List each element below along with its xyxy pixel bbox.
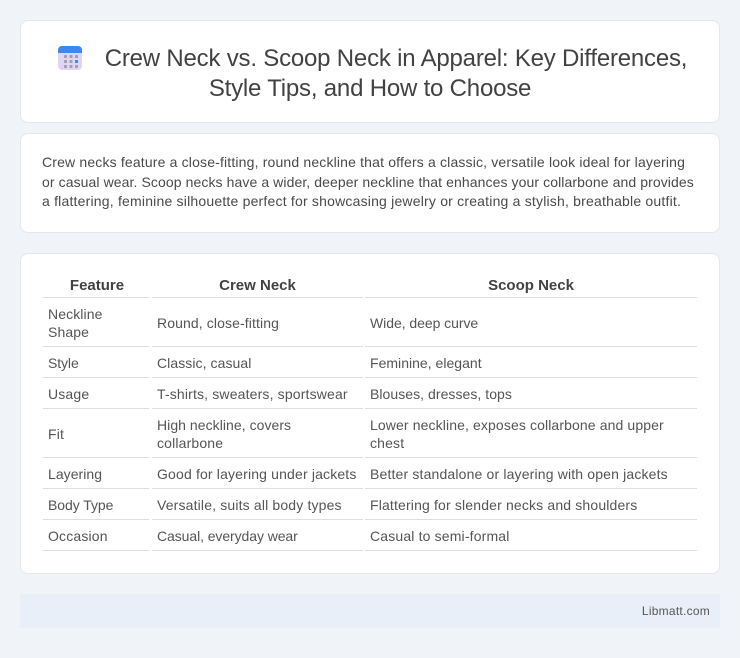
header: Feature: Feature [70, 277, 124, 294]
row: Layering: Layering [48, 466, 102, 482]
title [105, 45, 687, 102]
footer text: Libmatt.com [642, 604, 710, 618]
comparison table: T-shirts, sweaters, sportswear [157, 386, 348, 402]
comparison table: Lower neckline, exposes collarbone and upper [370, 417, 664, 433]
intro text [42, 154, 694, 209]
comparison table: Casual to semi-formal [370, 528, 510, 544]
comparison table: Classic, casual [157, 355, 251, 371]
comparison table: chest [370, 435, 404, 451]
row: Usage: Usage [48, 386, 89, 402]
comparison table: collarbone [157, 435, 223, 451]
comparison table [43, 277, 697, 551]
row: Neckline Shape [48, 306, 102, 340]
row: Style: Style [48, 355, 79, 371]
comparison table: Better standalone or layering with open jackets [370, 466, 668, 482]
comparison table: Good for layering under jackets [157, 466, 357, 482]
comparison table: Flattering for slender necks and shoulders [370, 497, 637, 513]
icon: calendar [58, 46, 82, 70]
comparison table: Blouses, dresses, tops [370, 386, 512, 402]
row: Occasion: Occasion [48, 528, 108, 544]
intro text: Crew necks feature a close-fitting, round neckline that offers a classic, versatile look ideal for layering [42, 154, 685, 170]
intro text: a flattering, feminine silhouette perfect for showcasing jewelry or creating a stylish, breathable outfit. [42, 193, 681, 209]
intro text: or casual wear. Scoop necks have a wider, deeper neckline that enhances your collarbone and provides [42, 174, 694, 190]
comparison table: Feminine, elegant [370, 355, 482, 371]
comparison table: Versatile, suits all body types [157, 497, 342, 513]
row: Neckline Shape: Neckline [48, 306, 102, 322]
row: Body Type: Body Type [48, 497, 113, 513]
header: Crew Neck: Crew Neck [219, 277, 296, 294]
header: Scoop Neck: Scoop Neck [488, 277, 574, 294]
comparison table: Wide, deep curve [370, 315, 478, 331]
footer bar [20, 594, 720, 628]
row: Neckline Shape: Shape [48, 324, 89, 340]
comparison table: Round, close-fitting [157, 315, 279, 331]
title: Crew Neck vs. Scoop Neck in Apparel: Key Differences, [105, 45, 687, 72]
comparison table: Casual, everyday wear [157, 528, 298, 544]
table card [20, 253, 720, 574]
title: Style Tips, and How to Choose [209, 74, 531, 102]
intro card [20, 133, 720, 233]
row: Fit: Fit [48, 426, 64, 442]
comparison table: High neckline, covers [157, 417, 291, 433]
header card [20, 20, 720, 123]
